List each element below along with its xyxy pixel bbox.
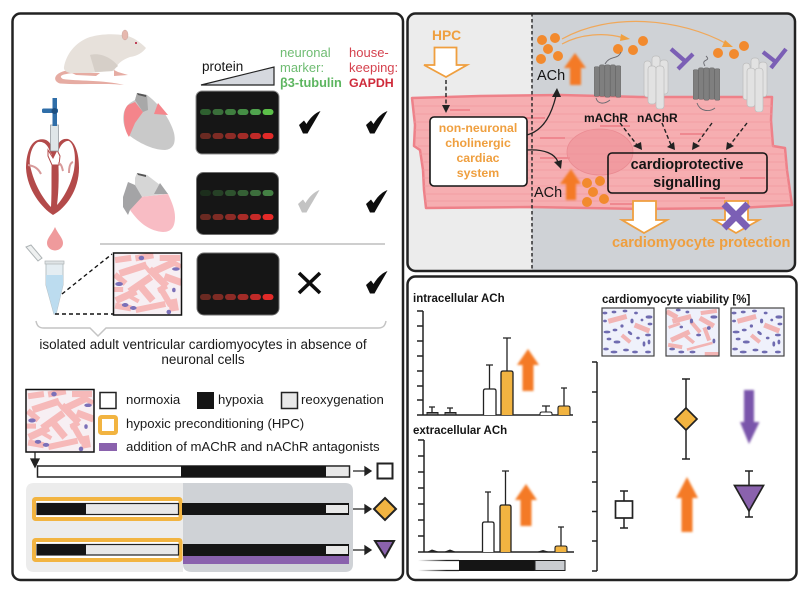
arrow: ACh increase top: [564, 53, 586, 85]
heading: HPC: HPC: [432, 28, 461, 43]
image: cardiomyocytes: [113, 252, 183, 315]
column heading: housekeeping: GAPDH: [349, 76, 394, 90]
background: index ischemia phase: [183, 483, 353, 572]
ACh molecules: group 2: [613, 36, 648, 55]
timeline bar: [418, 560, 565, 571]
data point: antagonist triangle: [734, 471, 764, 517]
dashed zoom lines: [55, 254, 113, 314]
image: control cells: [602, 308, 654, 356]
arrow: to diamond: [353, 505, 371, 513]
check: row 1 housekeeping: [366, 111, 388, 134]
data point: control square: [616, 491, 632, 528]
arrow: to square: [353, 467, 371, 475]
panel: results: [408, 276, 796, 580]
label: mAChR: mAChR: [584, 111, 628, 125]
chart title: extracellular ACh: extracellular ACh: [413, 425, 507, 437]
protocol bar: HPC: [34, 499, 349, 519]
marker: square: [378, 464, 392, 478]
data point: HPC diamond: [675, 379, 697, 459]
box: non-neuronal cholinergic cardiac system: cholinergic: [445, 136, 511, 150]
box: cardioprotective signalling: [608, 153, 767, 193]
column heading: housekeeping: keeping:: [349, 60, 398, 75]
receptor: nAChR 2: [743, 58, 767, 112]
legend: hypoxia: hypoxia: [218, 392, 264, 407]
label: ACh top: ACh: [537, 68, 565, 84]
column heading: neuronal marker: neuronal: [280, 45, 331, 60]
icon: tube with cells: [26, 245, 64, 314]
antagonist: purple blocker 1: [671, 49, 693, 69]
box: cardioprotective signalling: cardioprotective: [631, 157, 743, 173]
caption: isolated cardiomyocytes: neuronal cells: [161, 352, 245, 367]
arrow: ACh to far receptor: [562, 21, 733, 47]
legend: antagonists: addition of mAChR and nAChR antagonists: [126, 439, 380, 454]
heart: preconditioned row 1: [123, 93, 175, 150]
panel border: [408, 14, 795, 271]
label: cardiomyocyte protection: cardiomyocyte protection: [612, 235, 790, 251]
box: non-neuronal cholinergic cardiac system: [430, 117, 527, 186]
cross: blocked: [724, 204, 748, 228]
protocol bar: control: [38, 466, 350, 477]
heart: row 2: [123, 173, 175, 232]
receptor: mAChR 1: [594, 52, 621, 103]
column heading: neuronal marker: β3-tubulin: [280, 75, 342, 90]
label: ACh lower: ACh: [534, 185, 562, 201]
label: nAChR: nAChR: [637, 111, 678, 125]
image: HPC cells: [665, 308, 719, 356]
arrow: HPC hollow down: [424, 48, 467, 77]
western blot 3: [197, 253, 279, 315]
arrows: dashed to signalling: [620, 123, 747, 145]
check: row 2 neuronal (faint): [298, 190, 320, 212]
panel: mechanism: [408, 13, 795, 271]
arrow: dashed to system: [442, 80, 450, 113]
column heading: protein: protein: [202, 59, 243, 74]
legend: hypoxia: [197, 392, 264, 409]
antagonist: purple blocker 2: [763, 49, 786, 68]
icon: blood drop: [47, 227, 63, 251]
legend: [99, 392, 384, 454]
icon: rat: [55, 30, 146, 85]
arrow: protection blocked: [714, 201, 759, 233]
axis: viability: [592, 362, 597, 571]
column heading: housekeeping: house-: [349, 45, 389, 60]
image: legend cardiomyocytes: [26, 388, 95, 452]
panel: isolated cardiomyocyte experiment: [12, 14, 403, 580]
box: non-neuronal cholinergic cardiac system: cardiac: [456, 151, 500, 165]
box: cardioprotective signalling: signalling: [653, 175, 721, 191]
arrow: ACh to mAChR: [562, 34, 630, 44]
receptor: nAChR 1: [644, 56, 668, 109]
arrow: cells to protocol: [31, 452, 39, 467]
chart title: cardiomyocyte viability: cardiomyocyte viability [%]: [602, 294, 750, 306]
legend: normoxia: [100, 392, 181, 408]
box: non-neuronal cholinergic cardiac system: system: [457, 166, 499, 180]
ACh molecules: released: [536, 33, 563, 64]
ACh molecules: intracellular: [582, 176, 609, 207]
arrow: protection: [622, 201, 667, 233]
legend: HPC: hypoxic preconditioning (HPC): [126, 416, 304, 431]
brace: [36, 321, 386, 336]
bar chart: extracellular ACh: [418, 440, 574, 552]
arrow: intracellular increase: [517, 349, 539, 391]
receptor: mAChR 2: [693, 56, 720, 111]
protocol bar: HPC with antagonists: [34, 540, 349, 564]
background: preconditioning phase: [26, 483, 183, 572]
legend: normoxia: normoxia: [126, 392, 181, 407]
image: HPC plus antagonists cells: [731, 308, 784, 356]
column heading: neuronal marker: marker:: [280, 60, 324, 75]
arrow: ACh increase lower: [560, 169, 581, 200]
ACh molecules: group 3: [713, 41, 749, 59]
arrow: extracellular increase: [515, 484, 537, 526]
check: row 1 neuronal: [299, 111, 320, 134]
arrow: ACh intracellular: [527, 150, 562, 169]
caption: isolated cardiomyocytes: isolated adult ventricular cardiomyocytes in absence of: [39, 337, 367, 352]
arrowheads: dashed: [633, 142, 734, 150]
cross: row 3 neuronal: [299, 273, 320, 293]
legend: reoxygenation: reoxygenation: [301, 392, 384, 407]
arrow: ACh release outward: [527, 88, 561, 135]
bar chart: intracellular ACh: [417, 311, 573, 415]
cardiomyocyte fibre: [412, 95, 792, 209]
arrow: viability increase: [676, 477, 698, 532]
box: non-neuronal cholinergic cardiac system: non-neuronal: [439, 121, 517, 135]
marker: triangle: [375, 541, 394, 557]
icon: perfused heart with cannula: [26, 98, 79, 215]
check: row 2 housekeeping: [366, 190, 388, 212]
check: row 3 housekeeping: [366, 271, 388, 294]
icon: protein gradient wedge: [201, 67, 274, 85]
arrow: to triangle: [353, 546, 371, 554]
nucleus: [567, 129, 633, 175]
arrow: viability decrease: [740, 390, 760, 444]
western blot 2: [196, 172, 278, 234]
chart title: intracellular ACh: intracellular ACh: [413, 293, 505, 305]
marker: diamond: [374, 498, 396, 520]
western blot 1: [196, 91, 279, 154]
